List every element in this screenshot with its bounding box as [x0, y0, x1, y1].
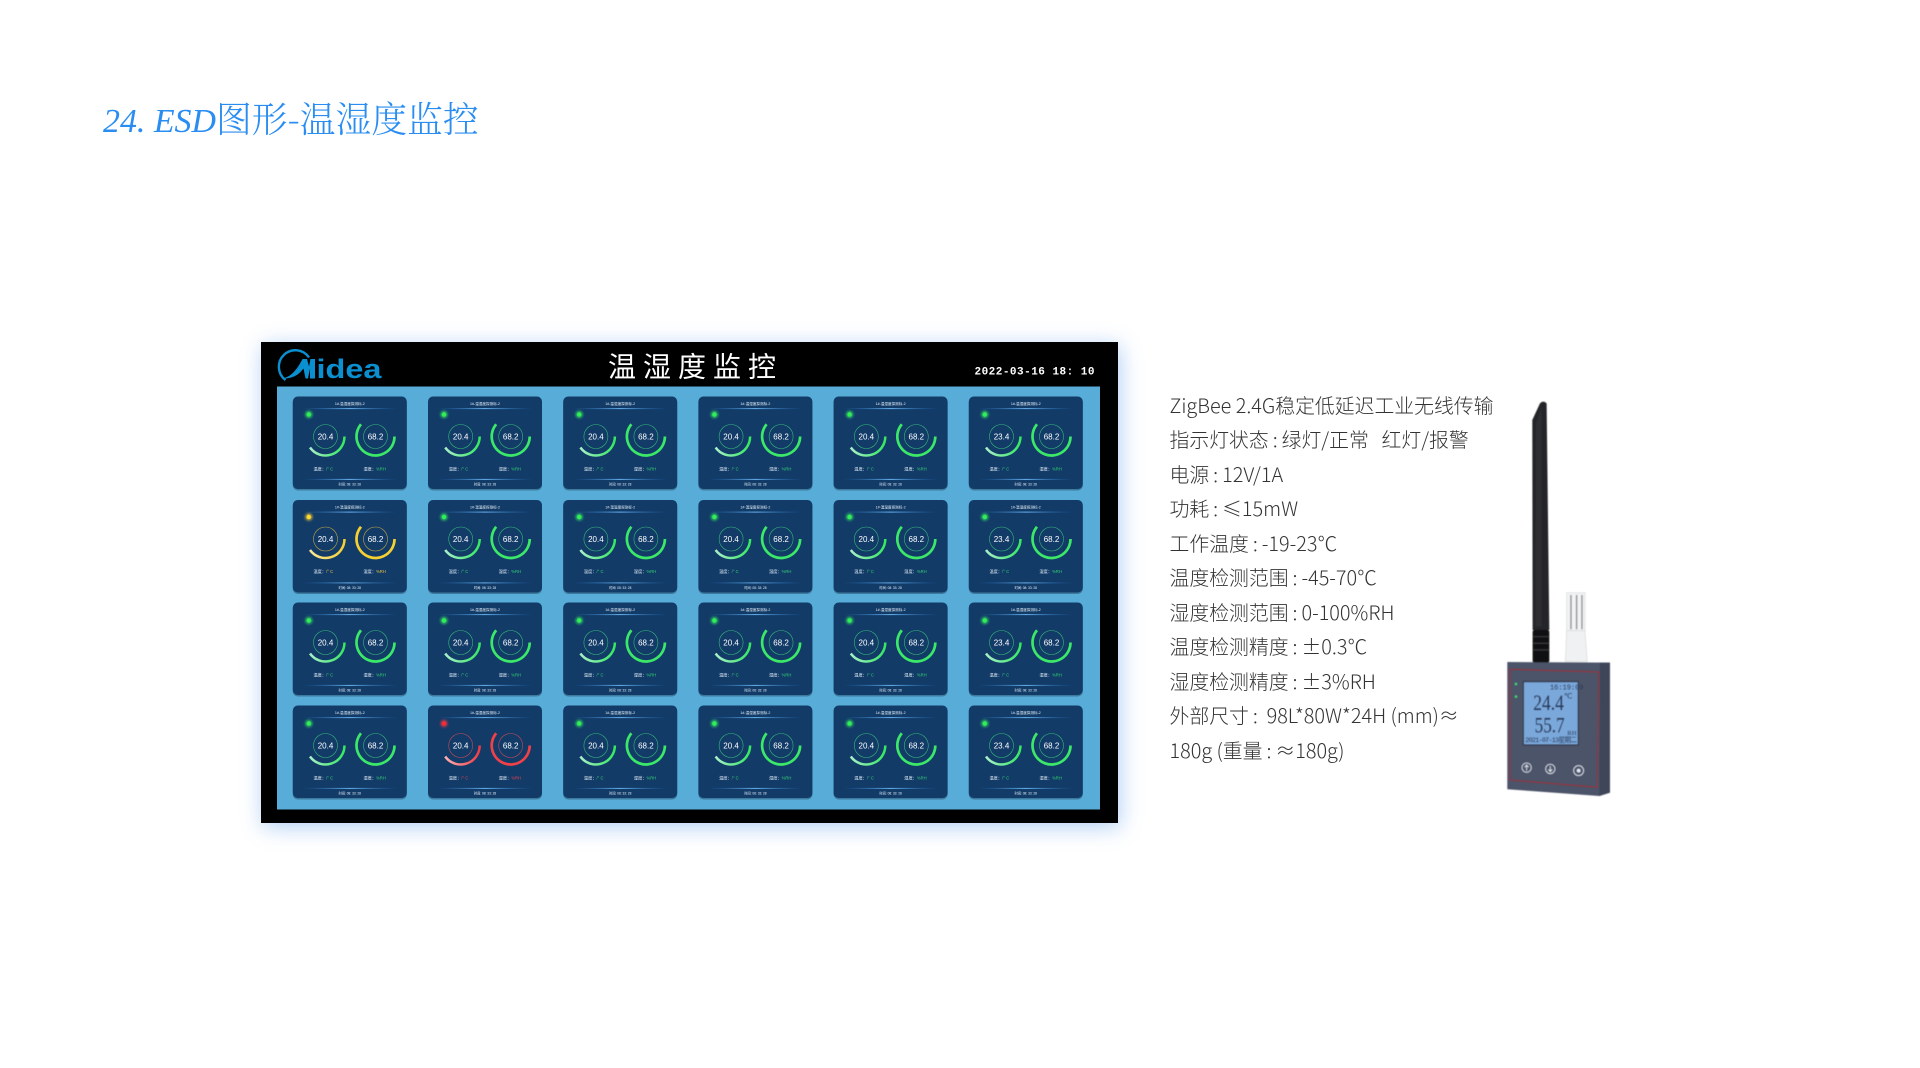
card r3c4 — [698, 602, 812, 696]
monitoring area background — [277, 386, 1100, 809]
card r2c4: 温度：/° C — [719, 568, 739, 575]
card r2c6: 1#-温湿度探测标-2 — [1011, 504, 1041, 509]
card r3c5: 湿度：%RH — [904, 671, 927, 678]
card r2c3: 温度：/° C — [584, 568, 604, 575]
card r1c1: 20.4 — [318, 432, 334, 441]
card r1c4: 温度：/° C — [719, 465, 739, 472]
card r4c4: 温度：/° C — [719, 774, 739, 781]
specification text block: 180g (重量 : ≈180g) — [1170, 735, 1345, 764]
card r1c6 — [969, 396, 1083, 490]
card r3c5: 时间: 08: 33: 28 — [879, 687, 902, 692]
card r1c5: 1#-温湿度探测标-2 — [876, 400, 906, 405]
card r3c5: 温度：/° C — [854, 671, 874, 678]
card r1c4: 湿度：%RH — [769, 465, 791, 472]
card r1c5: 湿度：%RH — [904, 465, 927, 472]
card r2c4: 68.2 — [773, 534, 789, 543]
card r4c5: 温度：/° C — [854, 774, 874, 781]
card r3c2: 20.4 — [453, 638, 469, 647]
card r4c4: 湿度：%RH — [769, 774, 791, 781]
card r3c3 — [563, 602, 677, 696]
card r3c4: 20.4 — [723, 638, 739, 647]
card r4c4 — [698, 705, 812, 799]
device body: 2021-07-13星期二 — [1525, 736, 1577, 744]
title: 24. ESD图形-温湿度监控 — [103, 92, 479, 142]
card r2c2: 1#-温湿度探测标-2 — [470, 504, 500, 509]
card r4c6: 1#-温湿度探测标-2 — [1011, 709, 1041, 714]
card r3c6: 23.4 — [994, 638, 1010, 647]
card r3c4: 湿度：%RH — [769, 671, 791, 678]
card r3c2: 时间: 08: 33: 28 — [474, 687, 496, 692]
card r3c1: 温度：/° C — [313, 671, 333, 678]
card r4c5 — [834, 705, 948, 799]
card r1c3: 20.4 — [588, 432, 604, 441]
card r3c3: 68.2 — [638, 638, 654, 647]
card r2c6: 时间: 08: 33: 28 — [1015, 584, 1037, 589]
card r4c1 — [293, 705, 407, 799]
device body: 55.7 — [1535, 713, 1565, 738]
card r4c3: 68.2 — [638, 741, 654, 750]
card r4c3: 湿度：%RH — [634, 774, 656, 781]
card r4c1: 68.2 — [368, 741, 384, 750]
card r3c2: 湿度：%RH — [499, 671, 521, 678]
card r2c6: 68.2 — [1044, 534, 1060, 543]
device body: 16:19:09 — [1550, 684, 1583, 692]
card r4c3: 20.4 — [588, 741, 604, 750]
card r1c1: 68.2 — [368, 432, 384, 441]
card r4c4: 68.2 — [773, 741, 789, 750]
card r4c3 — [563, 705, 677, 799]
card r3c1 — [293, 602, 407, 696]
card r1c2: 时间: 08: 33: 28 — [474, 481, 496, 486]
card r3c2 — [428, 602, 542, 696]
card r2c3: 时间: 08: 33: 28 — [609, 584, 632, 589]
card r3c5: 1#-温湿度探测标-2 — [876, 606, 906, 611]
card r1c2: 1#-温湿度探测标-2 — [470, 400, 500, 405]
card r1c1: 湿度：%RH — [363, 465, 386, 472]
card r2c5 — [834, 500, 948, 594]
card r1c6: 23.4 — [994, 432, 1010, 441]
card r3c6 — [969, 602, 1083, 696]
card r4c2 alarm: 时间: 08: 33: 28 — [474, 790, 496, 795]
card r1c2: 温度：/° C — [449, 465, 468, 472]
card r3c2: 1#-温湿度探测标-2 — [470, 606, 500, 611]
card r3c1: 湿度：%RH — [363, 671, 386, 678]
card r4c3: 温度：/° C — [584, 774, 604, 781]
card r4c1: 1#-温湿度探测标-2 — [335, 709, 365, 714]
card r3c1: 68.2 — [368, 638, 384, 647]
card r4c3: 时间: 08: 33: 28 — [609, 790, 632, 795]
card r2c6: 23.4 — [994, 534, 1010, 543]
card r3c3: 20.4 — [588, 638, 604, 647]
card r2c1 warning: 1#-温湿度探测标-2 — [335, 504, 365, 509]
card r4c5: 1#-温湿度探测标-2 — [876, 709, 906, 714]
card r2c5: 68.2 — [909, 534, 925, 543]
card r4c2 alarm: 温度：/° C — [449, 774, 468, 781]
card r4c5: 20.4 — [859, 741, 875, 750]
card r2c3: 68.2 — [638, 534, 654, 543]
card r2c2: 20.4 — [453, 534, 469, 543]
device body — [1507, 662, 1610, 796]
card r1c2: 20.4 — [453, 432, 469, 441]
card r4c1: 20.4 — [318, 741, 334, 750]
card r4c1: 时间: 08: 33: 28 — [339, 790, 361, 795]
card r1c4 — [698, 396, 812, 490]
card r3c6: 湿度：%RH — [1039, 671, 1062, 678]
specification text block: 外部尺寸 : 98L*80W*24H (mm)≈ — [1170, 700, 1459, 729]
card r2c1 warning: 时间: 08: 33: 28 — [339, 584, 361, 589]
card r3c1: 时间: 08: 33: 28 — [339, 687, 361, 692]
card r2c5: 温度：/° C — [854, 568, 874, 575]
card r1c6: 1#-温湿度探测标-2 — [1011, 400, 1041, 405]
card r2c4: 20.4 — [723, 534, 739, 543]
card r1c1: 时间: 08: 33: 28 — [339, 481, 361, 486]
card r2c4: 湿度：%RH — [769, 568, 791, 575]
card r4c6: 23.4 — [994, 741, 1010, 750]
card r3c4: 时间: 08: 33: 28 — [744, 687, 767, 692]
card r3c6: 温度：/° C — [989, 671, 1009, 678]
card r3c3: 温度：/° C — [584, 671, 604, 678]
card r1c2: 68.2 — [503, 432, 519, 441]
card r4c4: 1#-温湿度探测标-2 — [740, 709, 770, 714]
card r1c5: 68.2 — [909, 432, 925, 441]
card r1c6: 湿度：%RH — [1039, 465, 1062, 472]
card r2c6: 温度：/° C — [989, 568, 1009, 575]
card r2c4: 时间: 08: 33: 28 — [744, 584, 767, 589]
card r1c1 — [293, 396, 407, 490]
card r2c4: 1#-温湿度探测标-2 — [740, 504, 770, 509]
card r4c6 — [969, 705, 1083, 799]
card r2c5: 湿度：%RH — [904, 568, 927, 575]
card r3c2: 温度：/° C — [449, 671, 468, 678]
card r2c1 warning: 20.4 — [318, 534, 334, 543]
card r1c6: 68.2 — [1044, 432, 1060, 441]
card r4c6: 温度：/° C — [989, 774, 1009, 781]
card r2c6 — [969, 500, 1083, 594]
card r4c5: 湿度：%RH — [904, 774, 927, 781]
card r4c1: 温度：/° C — [313, 774, 333, 781]
card r1c3: 温度：/° C — [584, 465, 604, 472]
card r3c6: 68.2 — [1044, 638, 1060, 647]
specification text block: 湿度检测精度 : ±3%RH — [1170, 666, 1376, 695]
card r1c6: 温度：/° C — [989, 465, 1009, 472]
icon: Midea logo: idea — [316, 354, 383, 384]
card r2c2: 68.2 — [503, 534, 519, 543]
card r3c4: 温度：/° C — [719, 671, 739, 678]
icon: Midea logo — [279, 350, 383, 384]
card r2c1 warning: 温度：/° C — [313, 568, 333, 575]
card r2c5: 1#-温湿度探测标-2 — [876, 504, 906, 509]
card r3c5 — [834, 602, 948, 696]
card r4c2 alarm: 1#-温湿度探测标-2 — [470, 709, 500, 714]
card r1c3: 1#-温湿度探测标-2 — [605, 400, 635, 405]
card r4c4: 时间: 08: 33: 28 — [744, 790, 767, 795]
card r2c3: 1#-温湿度探测标-2 — [605, 504, 635, 509]
card r2c4 — [698, 500, 812, 594]
card r4c2 alarm: 湿度：%RH — [499, 774, 521, 781]
card r2c3: 20.4 — [588, 534, 604, 543]
card r1c3: 68.2 — [638, 432, 654, 441]
card r1c5: 时间: 08: 33: 28 — [879, 481, 902, 486]
card r1c3 — [563, 396, 677, 490]
specification text block: 功耗 : ≤15mW — [1170, 493, 1298, 522]
panel: monitoring dashboard — [261, 342, 1118, 823]
card r3c5: 20.4 — [859, 638, 875, 647]
card r3c1: 1#-温湿度探测标-2 — [335, 606, 365, 611]
card r3c6: 时间: 08: 33: 28 — [1015, 687, 1037, 692]
card r1c2 — [428, 396, 542, 490]
card r1c4: 68.2 — [773, 432, 789, 441]
card r2c5: 20.4 — [859, 534, 875, 543]
date and time: 2022-03-16 18: 10 — [974, 366, 1094, 378]
card r1c5 — [834, 396, 948, 490]
card r4c2 alarm: 68.2 — [503, 741, 519, 750]
card r3c4: 68.2 — [773, 638, 789, 647]
card r4c6: 时间: 08: 33: 28 — [1015, 790, 1037, 795]
card r4c6: 湿度：%RH — [1039, 774, 1062, 781]
card r3c2: 68.2 — [503, 638, 519, 647]
device body: ℃ — [1564, 691, 1572, 700]
card r4c6: 68.2 — [1044, 741, 1060, 750]
specification text block: 温度检测范围 : -45-70℃ — [1170, 562, 1377, 591]
specification text block: 温度检测精度 : ±0.3℃ — [1170, 631, 1367, 660]
card r2c1 warning: 湿度：%RH — [363, 568, 386, 575]
specification text block — [1170, 390, 1494, 764]
specification text block: 电源 : 12V/1A — [1170, 459, 1283, 488]
card r3c3: 1#-温湿度探测标-2 — [605, 606, 635, 611]
card r2c1 warning: 68.2 — [368, 534, 384, 543]
card r2c5: 时间: 08: 33: 28 — [879, 584, 902, 589]
card r4c2 alarm: 20.4 — [453, 741, 469, 750]
icon: wireless sensor device — [1506, 400, 1611, 797]
antenna — [1532, 402, 1549, 663]
card r3c3: 时间: 08: 33: 28 — [609, 687, 632, 692]
card r1c5: 温度：/° C — [854, 465, 874, 472]
card r3c1: 20.4 — [318, 638, 334, 647]
card r1c6: 时间: 08: 33: 28 — [1015, 481, 1037, 486]
card r2c3: 湿度：%RH — [634, 568, 656, 575]
card r4c3: 1#-温湿度探测标-2 — [605, 709, 635, 714]
card r4c5: 时间: 08: 33: 28 — [879, 790, 902, 795]
card r4c1: 湿度：%RH — [363, 774, 386, 781]
card r2c2: 湿度：%RH — [499, 568, 521, 575]
card r2c3 — [563, 500, 677, 594]
card r1c1: 温度：/° C — [313, 465, 333, 472]
card r1c4: 1#-温湿度探测标-2 — [740, 400, 770, 405]
card r4c4: 20.4 — [723, 741, 739, 750]
card r3c5: 68.2 — [909, 638, 925, 647]
device body: 24.4 — [1533, 690, 1564, 715]
dashboard heading: 温湿度监控 — [608, 345, 783, 385]
card r2c2: 时间: 08: 33: 28 — [474, 584, 496, 589]
device body: RH — [1567, 730, 1577, 737]
card r1c5: 20.4 — [859, 432, 875, 441]
card r1c3: 湿度：%RH — [634, 465, 656, 472]
card r3c4: 1#-温湿度探测标-2 — [740, 606, 770, 611]
card r4c2 alarm — [428, 705, 542, 799]
card r2c2 — [428, 500, 542, 594]
humidity probe — [1565, 593, 1587, 662]
card r1c2: 湿度：%RH — [499, 465, 521, 472]
card r4c5: 68.2 — [909, 741, 925, 750]
card r3c6: 1#-温湿度探测标-2 — [1011, 606, 1041, 611]
specification text block: 湿度检测范围 : 0-100%RH — [1170, 597, 1394, 626]
card r3c3: 湿度：%RH — [634, 671, 656, 678]
card r2c6: 湿度：%RH — [1039, 568, 1062, 575]
specification text block: ZigBee 2.4G稳定低延迟工业无线传输 — [1170, 390, 1494, 418]
specification text block: 指示灯状态 : 绿灯/正常 红灯/报警 — [1170, 424, 1469, 453]
card r2c1 warning — [293, 500, 407, 594]
card r1c4: 20.4 — [723, 432, 739, 441]
specification text block: 工作温度 : -19-23℃ — [1170, 528, 1337, 557]
card r1c4: 时间: 08: 33: 28 — [744, 481, 767, 486]
card r1c3: 时间: 08: 33: 28 — [609, 481, 632, 486]
card r1c1: 1#-温湿度探测标-2 — [335, 400, 365, 405]
card r2c2: 温度：/° C — [449, 568, 468, 575]
